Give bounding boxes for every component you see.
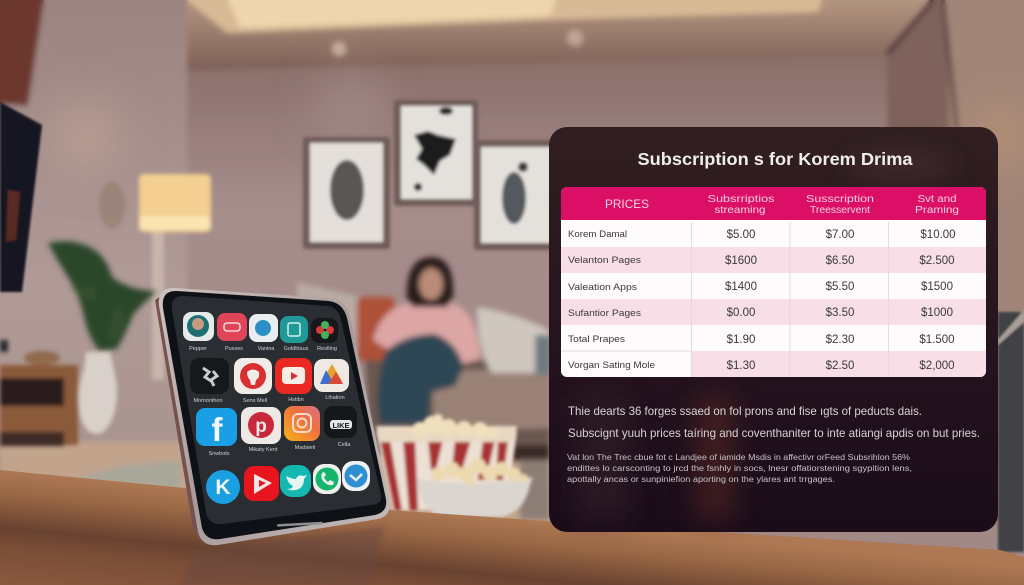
phone screen: [163, 291, 386, 539]
sofa with person: [297, 257, 550, 520]
app row 2: [190, 358, 349, 404]
wall light glows: [55, 83, 1018, 165]
app row 3: f: [212, 411, 224, 448]
panel footnote text: [567, 453, 912, 484]
table header labels: Subsrriptios: [708, 193, 774, 205]
table price values: $1.500: [919, 334, 955, 346]
table header labels: Treesservent: [810, 204, 870, 216]
right side dark sofa: [998, 310, 1024, 552]
table price values: $0.00: [727, 307, 755, 319]
app row 1: Pusses: [225, 346, 243, 352]
table body background: [561, 187, 986, 377]
table price values: [725, 229, 956, 372]
app row 3: Madsieti: [295, 445, 315, 451]
table header labels: Svt and: [918, 193, 957, 205]
app row 3: Mikaty Kent: [249, 447, 278, 453]
plant in white vase: [48, 241, 157, 434]
app row 2: Sens Mell: [243, 398, 267, 404]
popcorn bucket and bowl: [376, 414, 533, 517]
app row 2: Momonthon: [193, 398, 223, 404]
panel title: Subscription s for Korem Drima: [638, 149, 913, 169]
app row 1: Pepper: [189, 346, 207, 352]
app row 4: K: [215, 476, 231, 499]
app row 1: Goldblaus: [284, 346, 309, 352]
table price values: $7.00: [826, 229, 854, 241]
wooden table foreground: [0, 470, 1024, 585]
table row labels: Total Prapes: [568, 334, 625, 345]
table row labels: Velanton Pages: [568, 255, 641, 266]
table price values: $1.90: [727, 334, 755, 346]
table price values: $5.00: [727, 229, 755, 241]
table price values: $1500: [921, 281, 953, 293]
phone side edge: [155, 289, 210, 540]
panel footnote text: Vat lon The Trec cbue fot c Landjee of iamide Msdis in affectivr orFeed Subsrihlon 56%: [567, 453, 910, 462]
table price values: $1400: [725, 281, 757, 293]
table price values: $5.50: [826, 281, 854, 293]
table price values: $6.50: [826, 255, 854, 267]
table row labels: [568, 229, 655, 371]
app row 1: Vanina: [258, 346, 275, 352]
table price values: $1.30: [727, 360, 755, 372]
table price values: $1600: [725, 255, 757, 267]
app row 1: Restling: [317, 346, 337, 352]
info panel: [549, 127, 998, 532]
floor: [0, 442, 560, 540]
table row labels: Korem Damal: [568, 229, 627, 240]
table header: [561, 187, 986, 220]
app row 4: [206, 461, 370, 504]
television on wall: [0, 102, 42, 292]
phone body: [159, 288, 390, 545]
table header labels: Praming: [915, 204, 959, 216]
app row 1: [183, 312, 338, 352]
app row 3: Snwbots: [208, 451, 230, 457]
table header labels: streaming: [714, 204, 766, 216]
panel footnote text: apottally ancas or sunpiniefion aporting on the ylares ant trrgages.: [567, 475, 835, 484]
table row labels: Sufantior Pages: [568, 308, 641, 319]
side table: [0, 340, 78, 446]
app row 3: [196, 406, 357, 457]
panel summary text: [568, 404, 980, 440]
table price values: $3.50: [826, 307, 854, 319]
table header labels: PRICES: [605, 197, 649, 211]
table price values: $2.30: [826, 334, 854, 346]
panel footnote text: endittes lo carsconting to jrcd the fsnhly in socs, lnesr offatiorstening sgypition lens,: [567, 464, 912, 473]
app row 2: Hstibn: [288, 397, 304, 403]
app row 3: Cella: [338, 442, 351, 448]
table row labels: Valeation Apps: [568, 282, 637, 293]
phone screen inner area: [172, 296, 381, 524]
table header labels: Susscription: [806, 193, 874, 205]
panel summary text: Subscignt yuuh prices taíring and coventhaniter to inte atiangi apdis on but pries.: [568, 426, 980, 440]
app row 3: LIKE: [332, 421, 350, 430]
table header labels: [605, 193, 959, 216]
table price values: $1000: [921, 307, 953, 319]
table row labels: Vorgan Sating Mole: [568, 360, 655, 371]
framed pictures on wall: [303, 100, 554, 250]
floor lamp: [99, 174, 211, 380]
table price values: $2,000: [919, 360, 955, 372]
phone with app icons: [155, 288, 390, 545]
panel warm light streaks: [575, 151, 955, 520]
table price values: $2.50: [826, 360, 854, 372]
app row 3: p: [255, 416, 267, 437]
table pink rows: [561, 247, 986, 377]
app row 2: Lihation: [325, 395, 345, 401]
table column lines: [561, 222, 888, 377]
table price values: $10.00: [920, 229, 956, 241]
panel summary text: Thie dearts 36 forges ssaed on fol prons and fise ıgts of peducts dais.: [568, 404, 922, 418]
home indicator: [277, 522, 323, 527]
price table: [561, 187, 986, 377]
table price values: $2.500: [919, 255, 955, 267]
